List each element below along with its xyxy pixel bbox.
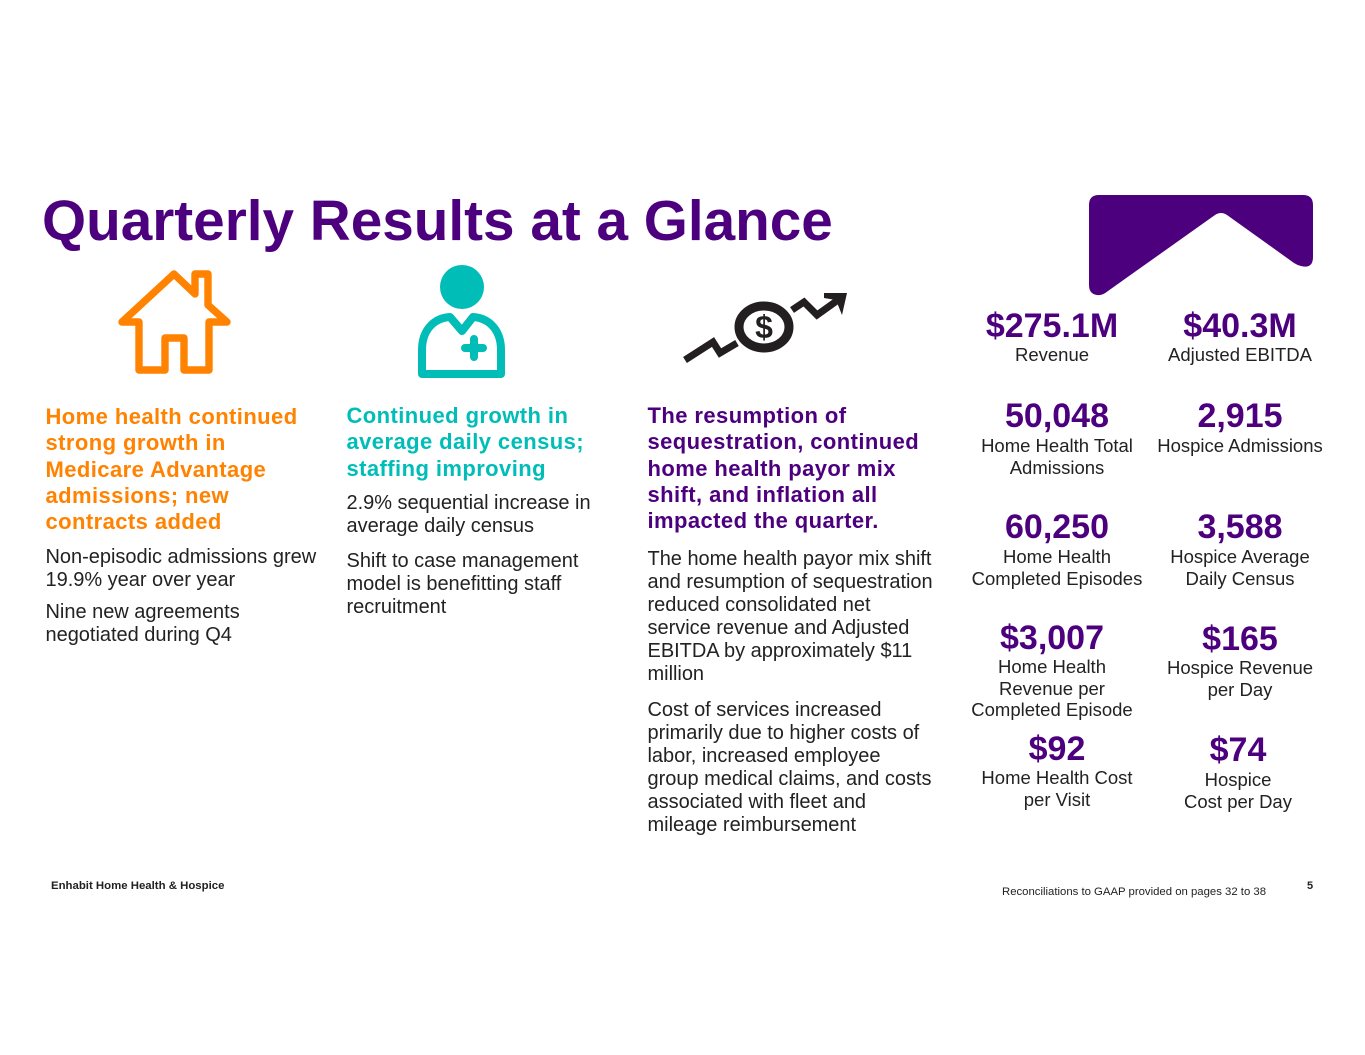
column 3: sequestration <box>648 403 933 836</box>
stat: hospice census: 3,588 <box>1197 508 1283 546</box>
stat: hospice census: Daily Census <box>1186 568 1294 588</box>
icon: house <box>118 270 231 374</box>
column 1 heading: Medicare Advantage <box>46 457 266 482</box>
stat: completed episodes: 60,250 <box>1005 508 1109 546</box>
stat: hospice revenue per day <box>1167 620 1313 700</box>
icon: dollar with rising arrow <box>683 293 847 363</box>
column 3 heading: The resumption of <box>648 403 847 428</box>
stat: adjusted EBITDA <box>1168 307 1312 365</box>
stat: revenue: Revenue <box>1015 344 1089 365</box>
column 3 heading: impacted the quarter. <box>648 508 879 533</box>
footer: company name: Enhabit Home Health & Hospice <box>51 880 224 892</box>
column 3 text: service revenue and Adjusted <box>648 617 909 639</box>
column 3 text 2: labor, increased employee <box>648 745 880 767</box>
column 3 text 2: group medical claims, and costs <box>648 768 931 790</box>
stat: revenue per episode <box>971 619 1133 720</box>
stat: revenue per episode: Completed Episode <box>971 699 1133 720</box>
stat: completed episodes: Home Health <box>1003 546 1111 567</box>
footer: reconciliation note: Reconciliations to GAAP provided on pages 32 to 38 <box>1002 886 1266 898</box>
column 1 text 2 <box>46 601 240 646</box>
page number: 5 <box>1307 880 1313 892</box>
stat: hospice revenue per day: per Day <box>1208 678 1272 700</box>
column 3 text: The home health payor mix shift <box>648 548 931 570</box>
stat: adjusted EBITDA: Adjusted EBITDA <box>1168 344 1312 365</box>
stat: revenue: $275.1M <box>986 307 1118 345</box>
logo: purple roof shape <box>1089 195 1313 296</box>
column 1 text 2: negotiated during Q4 <box>46 624 232 646</box>
stat: home health admissions: Home Health Total <box>981 435 1133 456</box>
column 3 heading <box>648 403 919 533</box>
stat: hospice census: Hospice Average <box>1170 546 1310 567</box>
column 3 text <box>648 548 933 685</box>
stat: hospice revenue per day: Hospice Revenue <box>1167 657 1313 678</box>
column 2 text 2: recruitment <box>346 596 446 618</box>
column 2 text 2: model is benefitting staff <box>346 573 561 595</box>
stat: hospice admissions: Hospice Admissions <box>1157 435 1323 456</box>
column 3 text: million <box>648 663 704 685</box>
column 3 heading: shift, and inflation all <box>648 482 878 507</box>
stat: hospice cost per day <box>1184 731 1292 812</box>
stat: home health admissions: 50,048 <box>1005 397 1109 435</box>
icon: clinician <box>418 265 505 378</box>
icon: dollar with rising arrow: $ <box>755 309 773 345</box>
column 2: census and staffing <box>346 403 591 618</box>
column 2 text <box>346 492 591 537</box>
stat: home health admissions: Admissions <box>1010 456 1104 478</box>
column 3 text 2: associated with fleet and <box>648 791 866 813</box>
column 1 heading: Home health continued <box>46 404 298 429</box>
column 3 heading: sequestration, continued <box>648 429 919 454</box>
stat: revenue <box>986 307 1118 365</box>
stat: hospice cost per day: $74 <box>1210 731 1266 769</box>
column 3 text 2: primarily due to higher costs of <box>648 722 919 744</box>
stat: cost per visit: $92 <box>1029 730 1085 768</box>
column 2 heading: average daily census; <box>346 429 584 454</box>
stat: hospice census <box>1170 508 1310 589</box>
column 3 text 2: Cost of services increased <box>648 699 882 721</box>
column 3 text: and resumption of sequestration <box>648 571 933 593</box>
column 3 text 2: mileage reimbursement <box>648 814 856 836</box>
column 2 text 2: Shift to case management <box>346 550 578 572</box>
column 1 text: Non-episodic admissions grew <box>46 546 316 568</box>
stat: home health admissions <box>981 397 1133 478</box>
column 3 text: EBITDA by approximately $11 <box>648 640 912 662</box>
column 1 text <box>46 546 316 591</box>
column 1: home health <box>46 404 316 646</box>
column 3 text 2 <box>648 699 931 836</box>
column 2 heading <box>346 403 584 481</box>
column 1 text: 19.9% year over year <box>46 569 235 591</box>
stat: adjusted EBITDA: $40.3M <box>1183 307 1297 345</box>
stat: hospice revenue per day: $165 <box>1202 620 1278 658</box>
column 3 heading: home health payor mix <box>648 456 896 481</box>
column 1 heading: contracts added <box>46 509 222 534</box>
column 2 text: average daily census <box>346 515 534 537</box>
stat: cost per visit <box>981 730 1133 810</box>
stat: revenue per episode: Home Health <box>998 656 1106 677</box>
column 2 text 2 <box>346 550 578 618</box>
column 1 heading <box>46 404 298 534</box>
stat: hospice cost per day: Hospice <box>1205 769 1271 790</box>
column 2 heading: staffing improving <box>346 456 546 481</box>
column 3 text: reduced consolidated net <box>648 594 871 616</box>
column 1 text 2: Nine new agreements <box>46 601 240 623</box>
stat: completed episodes: Completed Episodes <box>972 568 1142 588</box>
stat: hospice admissions <box>1157 397 1323 456</box>
column 1 heading: strong growth in <box>46 430 226 455</box>
stat: revenue per episode: Revenue per <box>999 678 1105 698</box>
stat: cost per visit: Home Health Cost <box>981 767 1133 788</box>
stat: cost per visit: per Visit <box>1024 788 1090 810</box>
stat: hospice admissions: 2,915 <box>1197 397 1283 435</box>
column 2 heading: Continued growth in <box>346 403 568 428</box>
column 2 text: 2.9% sequential increase in <box>346 492 591 514</box>
stat: revenue per episode: $3,007 <box>1000 619 1104 657</box>
stat: hospice cost per day: Cost per Day <box>1184 790 1292 812</box>
stat: completed episodes <box>972 508 1142 589</box>
column 1 heading: admissions; new <box>46 483 229 508</box>
title: Quarterly Results at a Glance <box>42 190 833 253</box>
